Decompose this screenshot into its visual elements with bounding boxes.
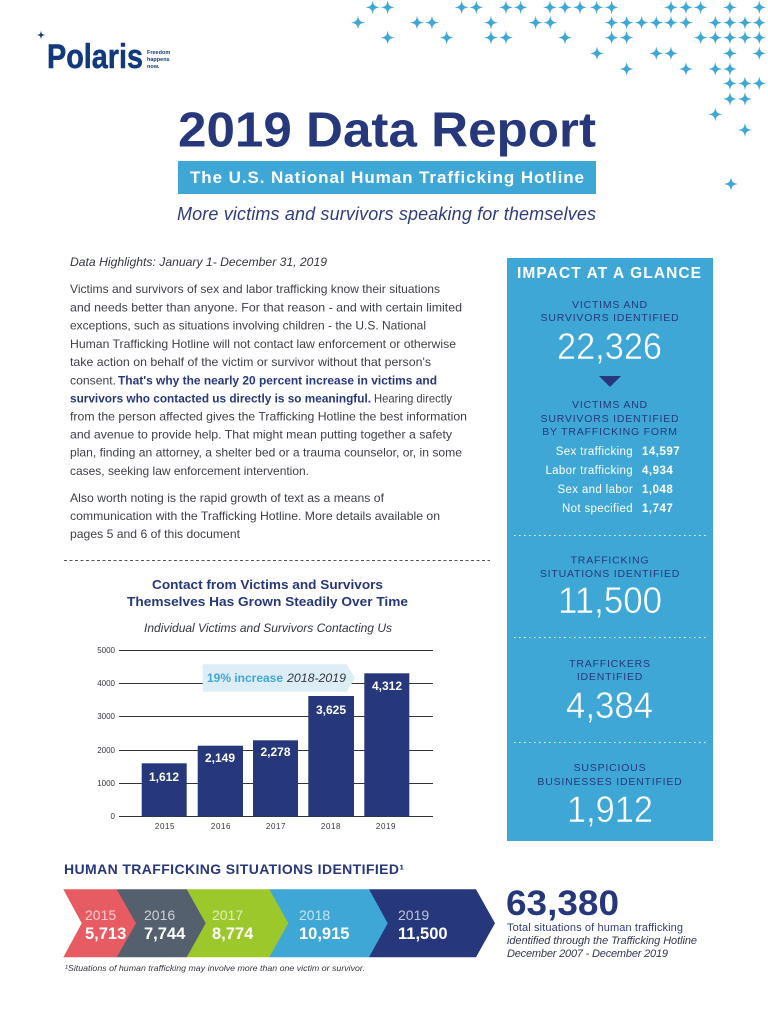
body paragraph 1 bbox=[70, 282, 467, 478]
stat: trafficking situations identified: TRAFFICKING bbox=[571, 554, 649, 566]
stat: suspicious businesses identified: 1,912 bbox=[567, 789, 653, 830]
body paragraph 1: Hearing directly bbox=[374, 392, 452, 406]
chevron timeline: 8,774 bbox=[212, 925, 254, 943]
chevron timeline: 11,500 bbox=[398, 925, 448, 943]
stat: trafficking situations identified: SITUATIONS IDENTIFIED bbox=[540, 568, 680, 580]
chart subtitle: Individual Victims and Survivors Contacting Us bbox=[144, 621, 392, 635]
chevron timeline: 2018 bbox=[299, 907, 330, 923]
callout: 19% increase: 19% increase bbox=[207, 671, 283, 685]
body paragraph 1: and needs better than anyone. For that reason - and with certain limited bbox=[70, 300, 462, 314]
panel heading: IMPACT AT A GLANCE bbox=[517, 265, 701, 282]
bar chart: 3,625 bbox=[316, 703, 346, 717]
subtitle banner: The U.S. National Human Trafficking Hotline bbox=[190, 168, 584, 187]
total stat: 63,380: 63,380 bbox=[506, 884, 619, 923]
callout: 19% increase bbox=[203, 664, 355, 692]
stat: suspicious businesses identified: BUSINESSES IDENTIFIED bbox=[537, 776, 683, 788]
footnote: ¹Situations of human trafficking may involve more than one victim or survivor. bbox=[65, 963, 365, 973]
panel: impact at a glance bbox=[507, 258, 713, 841]
stat table: by trafficking form: SURVIVORS IDENTIFIED bbox=[541, 413, 679, 425]
bar chart: 1000 bbox=[97, 779, 116, 788]
stat table: by trafficking form: Not specified bbox=[562, 503, 633, 515]
stat: suspicious businesses identified: SUSPICIOUS bbox=[574, 762, 646, 774]
body paragraph 1: That's why the nearly 20 percent increase in victims and bbox=[118, 374, 437, 388]
stat table: by trafficking form: Sex trafficking bbox=[556, 446, 633, 458]
chart title bbox=[127, 577, 408, 609]
body paragraph 1: consent. bbox=[70, 374, 116, 388]
chevron timeline: 5,713 bbox=[85, 925, 126, 943]
stat table: by trafficking form: 4,934 bbox=[642, 465, 673, 477]
stat table: by trafficking form: 14,597 bbox=[642, 446, 680, 458]
chevron timeline: 2015 bbox=[85, 907, 116, 923]
stat table: by trafficking form: Labor trafficking bbox=[545, 465, 633, 477]
bar chart: 0 bbox=[111, 812, 116, 821]
chevron timeline bbox=[63, 889, 495, 957]
title: 2019 Data Report bbox=[178, 104, 596, 158]
stat table: by trafficking form: BY TRAFFICKING FORM bbox=[542, 426, 678, 438]
chevron timeline: 10,915 bbox=[299, 925, 349, 943]
total stat: 63,380: identified through the Trafficking Hotline bbox=[507, 935, 697, 947]
body paragraph 1: plan, finding an attorney, a shelter bed or a trauma counselor, or, in some bbox=[70, 446, 462, 460]
chart title: Themselves Has Grown Steadily Over Time bbox=[127, 594, 408, 609]
body paragraph 2: pages 5 and 6 of this document bbox=[70, 527, 241, 541]
chevron timeline: 7,744 bbox=[144, 925, 186, 943]
bar chart: 2,278 bbox=[260, 745, 291, 759]
logo: Polaris: happens bbox=[147, 57, 170, 63]
stat: suspicious businesses identified bbox=[537, 762, 683, 830]
bar chart: 2016 bbox=[211, 822, 231, 831]
bar chart: 4000 bbox=[97, 679, 116, 688]
stat: victims and survivors identified bbox=[541, 299, 679, 367]
stat: trafficking situations identified: 11,500 bbox=[558, 580, 662, 621]
decorative star field bbox=[351, 0, 766, 191]
bar chart: 1,612 bbox=[149, 770, 179, 784]
body paragraph 2 bbox=[70, 491, 440, 541]
bar chart bbox=[97, 646, 433, 831]
stat table: by trafficking form: Sex and labor bbox=[557, 484, 633, 496]
bar chart: 5000 bbox=[97, 646, 116, 655]
logo: Polaris: Polaris bbox=[47, 38, 143, 76]
stat: traffickers identified: 4,384 bbox=[566, 685, 653, 726]
total stat: 63,380 bbox=[506, 884, 697, 960]
bar chart: 2017 bbox=[266, 822, 286, 831]
stat table: by trafficking form: VICTIMS AND bbox=[572, 399, 648, 411]
chevron timeline: 2016 bbox=[144, 907, 175, 923]
bar chart: 2015 bbox=[155, 822, 175, 831]
stat: traffickers identified: IDENTIFIED bbox=[577, 671, 643, 683]
body paragraph 1: exceptions, such as situations involving children - the U.S. National bbox=[70, 318, 426, 332]
subtitle banner bbox=[178, 161, 596, 194]
body paragraph 1: from the person affected gives the Trafficking Hotline the best information bbox=[70, 410, 467, 424]
stat: traffickers identified: TRAFFICKERS bbox=[569, 658, 651, 670]
bar chart: 2000 bbox=[97, 746, 116, 755]
bar chart: 4,312 bbox=[372, 679, 402, 693]
bar chart: 2018 bbox=[321, 822, 341, 831]
body paragraph 1: Human Trafficking Hotline will not contact law enforcement or otherwise bbox=[70, 337, 456, 351]
body paragraph 1: cases, seeking law enforcement intervention. bbox=[70, 464, 309, 478]
body paragraph 2: communication with the Trafficking Hotline. More details available on bbox=[70, 509, 440, 523]
logo: Polaris: now. bbox=[147, 64, 160, 70]
stat: trafficking situations identified bbox=[540, 554, 680, 621]
stat table: by trafficking form bbox=[541, 399, 680, 515]
total stat: 63,380: December 2007 - December 2019 bbox=[507, 948, 668, 960]
body paragraph 1: and avenue to provide help. That might mean putting together a safety bbox=[70, 428, 452, 442]
stat: traffickers identified bbox=[566, 658, 653, 726]
section heading: situations identified: HUMAN TRAFFICKING SITUATIONS IDENTIFIED¹ bbox=[64, 861, 404, 877]
total stat: 63,380: Total situations of human trafficking bbox=[507, 922, 683, 934]
stat: victims and survivors identified: SURVIVORS IDENTIFIED bbox=[541, 312, 679, 324]
stat: victims and survivors identified: 22,326 bbox=[557, 326, 662, 367]
callout: 19% increase: 2018-2019 bbox=[286, 671, 346, 685]
chart title: Contact from Victims and Survivors bbox=[152, 577, 383, 592]
tagline: More victims and survivors speaking for themselves bbox=[177, 204, 596, 224]
chevron timeline: 2019 bbox=[398, 907, 429, 923]
body paragraph 1: survivors who contacted us directly is so meaningful. bbox=[70, 392, 371, 406]
body paragraph 1: Victims and survivors of sex and labor trafficking know their situations bbox=[70, 282, 440, 296]
body paragraph 2: Also worth noting is the rapid growth of text as a means of bbox=[70, 491, 385, 505]
bar chart: 2,149 bbox=[205, 751, 235, 765]
stat table: by trafficking form: 1,747 bbox=[642, 503, 673, 515]
logo: Polaris: Freedom bbox=[147, 50, 170, 56]
bar chart: 2019 bbox=[376, 822, 396, 831]
data highlights date line: Data Highlights: January 1- December 31, 2019 bbox=[70, 255, 327, 269]
icon: down arrow bbox=[599, 376, 621, 387]
stat table: by trafficking form: 1,048 bbox=[642, 484, 673, 496]
body paragraph 1: take action on behalf of the victim or survivor without that person's bbox=[70, 355, 431, 369]
bar chart: 3000 bbox=[97, 712, 116, 721]
stat: victims and survivors identified: VICTIMS AND bbox=[572, 299, 648, 311]
chevron timeline: 2017 bbox=[212, 907, 243, 923]
